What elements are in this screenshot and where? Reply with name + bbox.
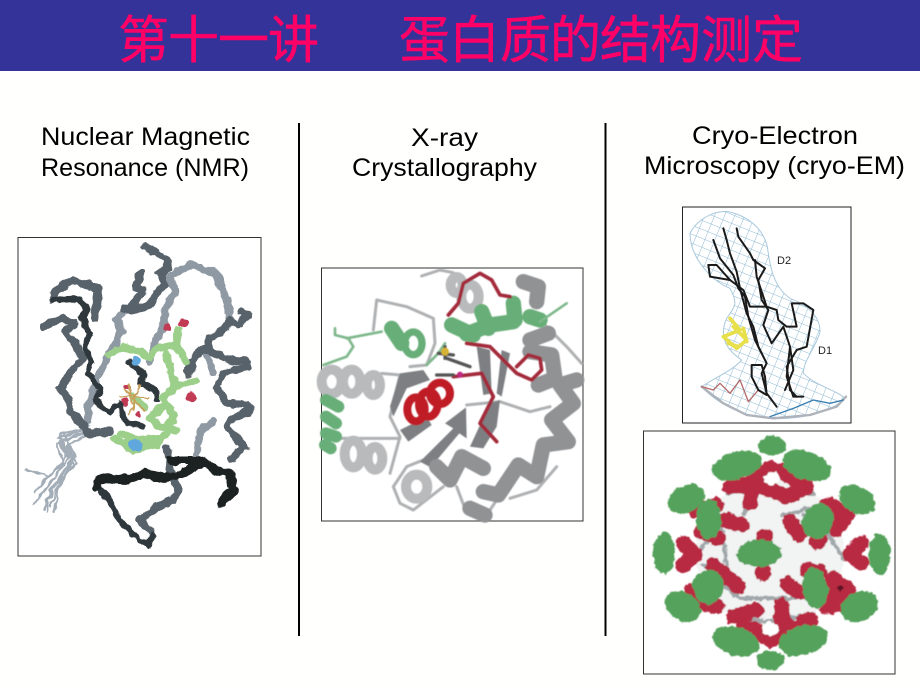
base rim bbox=[702, 387, 846, 418]
yellow ligand bbox=[723, 318, 747, 348]
panel: NMR structure ensemble bbox=[18, 238, 261, 556]
black backbone bbox=[708, 228, 813, 407]
label D2: D2 bbox=[777, 255, 791, 267]
mesh body bbox=[690, 211, 845, 419]
heading: NMR: Resonance (NMR) bbox=[41, 154, 249, 182]
red spikes bbox=[683, 468, 862, 640]
green helix turn bbox=[405, 332, 422, 355]
green ligand bbox=[108, 330, 197, 450]
label D1: D1 bbox=[818, 345, 832, 357]
heading: X-ray: Crystallography bbox=[352, 154, 538, 182]
title banner bbox=[0, 0, 920, 71]
grey loops bbox=[337, 270, 582, 520]
black loop bbox=[97, 460, 233, 503]
green spikes bbox=[653, 436, 891, 670]
title: 第十一讲 bbox=[118, 12, 319, 69]
green loop bbox=[323, 303, 567, 365]
panel: X-ray crystal structure ribbon bbox=[322, 268, 583, 521]
red oxygens bbox=[121, 319, 196, 418]
capsid sphere bbox=[696, 479, 844, 627]
panel: cryo-EM virus reconstruction bbox=[644, 431, 895, 674]
green helices bbox=[392, 303, 540, 343]
red helix bbox=[407, 383, 450, 421]
heading: NMR bbox=[41, 123, 250, 182]
light chains bbox=[88, 265, 230, 453]
heading: cryo-EM: Microscopy (cryo-EM) bbox=[644, 152, 905, 180]
ligand bbox=[437, 347, 470, 375]
blue atoms bbox=[127, 356, 143, 451]
mid chains bbox=[43, 247, 250, 535]
heading: X-ray: X-ray bbox=[411, 124, 479, 152]
heading: cryo-EM bbox=[644, 122, 905, 180]
grey helices bbox=[322, 277, 479, 499]
green side helix bbox=[325, 400, 338, 448]
red loop bbox=[448, 273, 542, 442]
tail strands bbox=[27, 425, 90, 512]
dark chain bbox=[52, 298, 157, 545]
barrel sheet arrows bbox=[390, 347, 510, 467]
grey bottom-right helix bbox=[437, 282, 577, 515]
title: 蛋白质的结构测定 bbox=[399, 12, 803, 69]
heading: NMR: Nuclear Magnetic bbox=[41, 123, 250, 151]
panel: cryo-EM density map bbox=[682, 207, 851, 423]
heading: X-ray bbox=[352, 124, 538, 182]
heading: cryo-EM: Cryo-Electron bbox=[692, 122, 858, 150]
